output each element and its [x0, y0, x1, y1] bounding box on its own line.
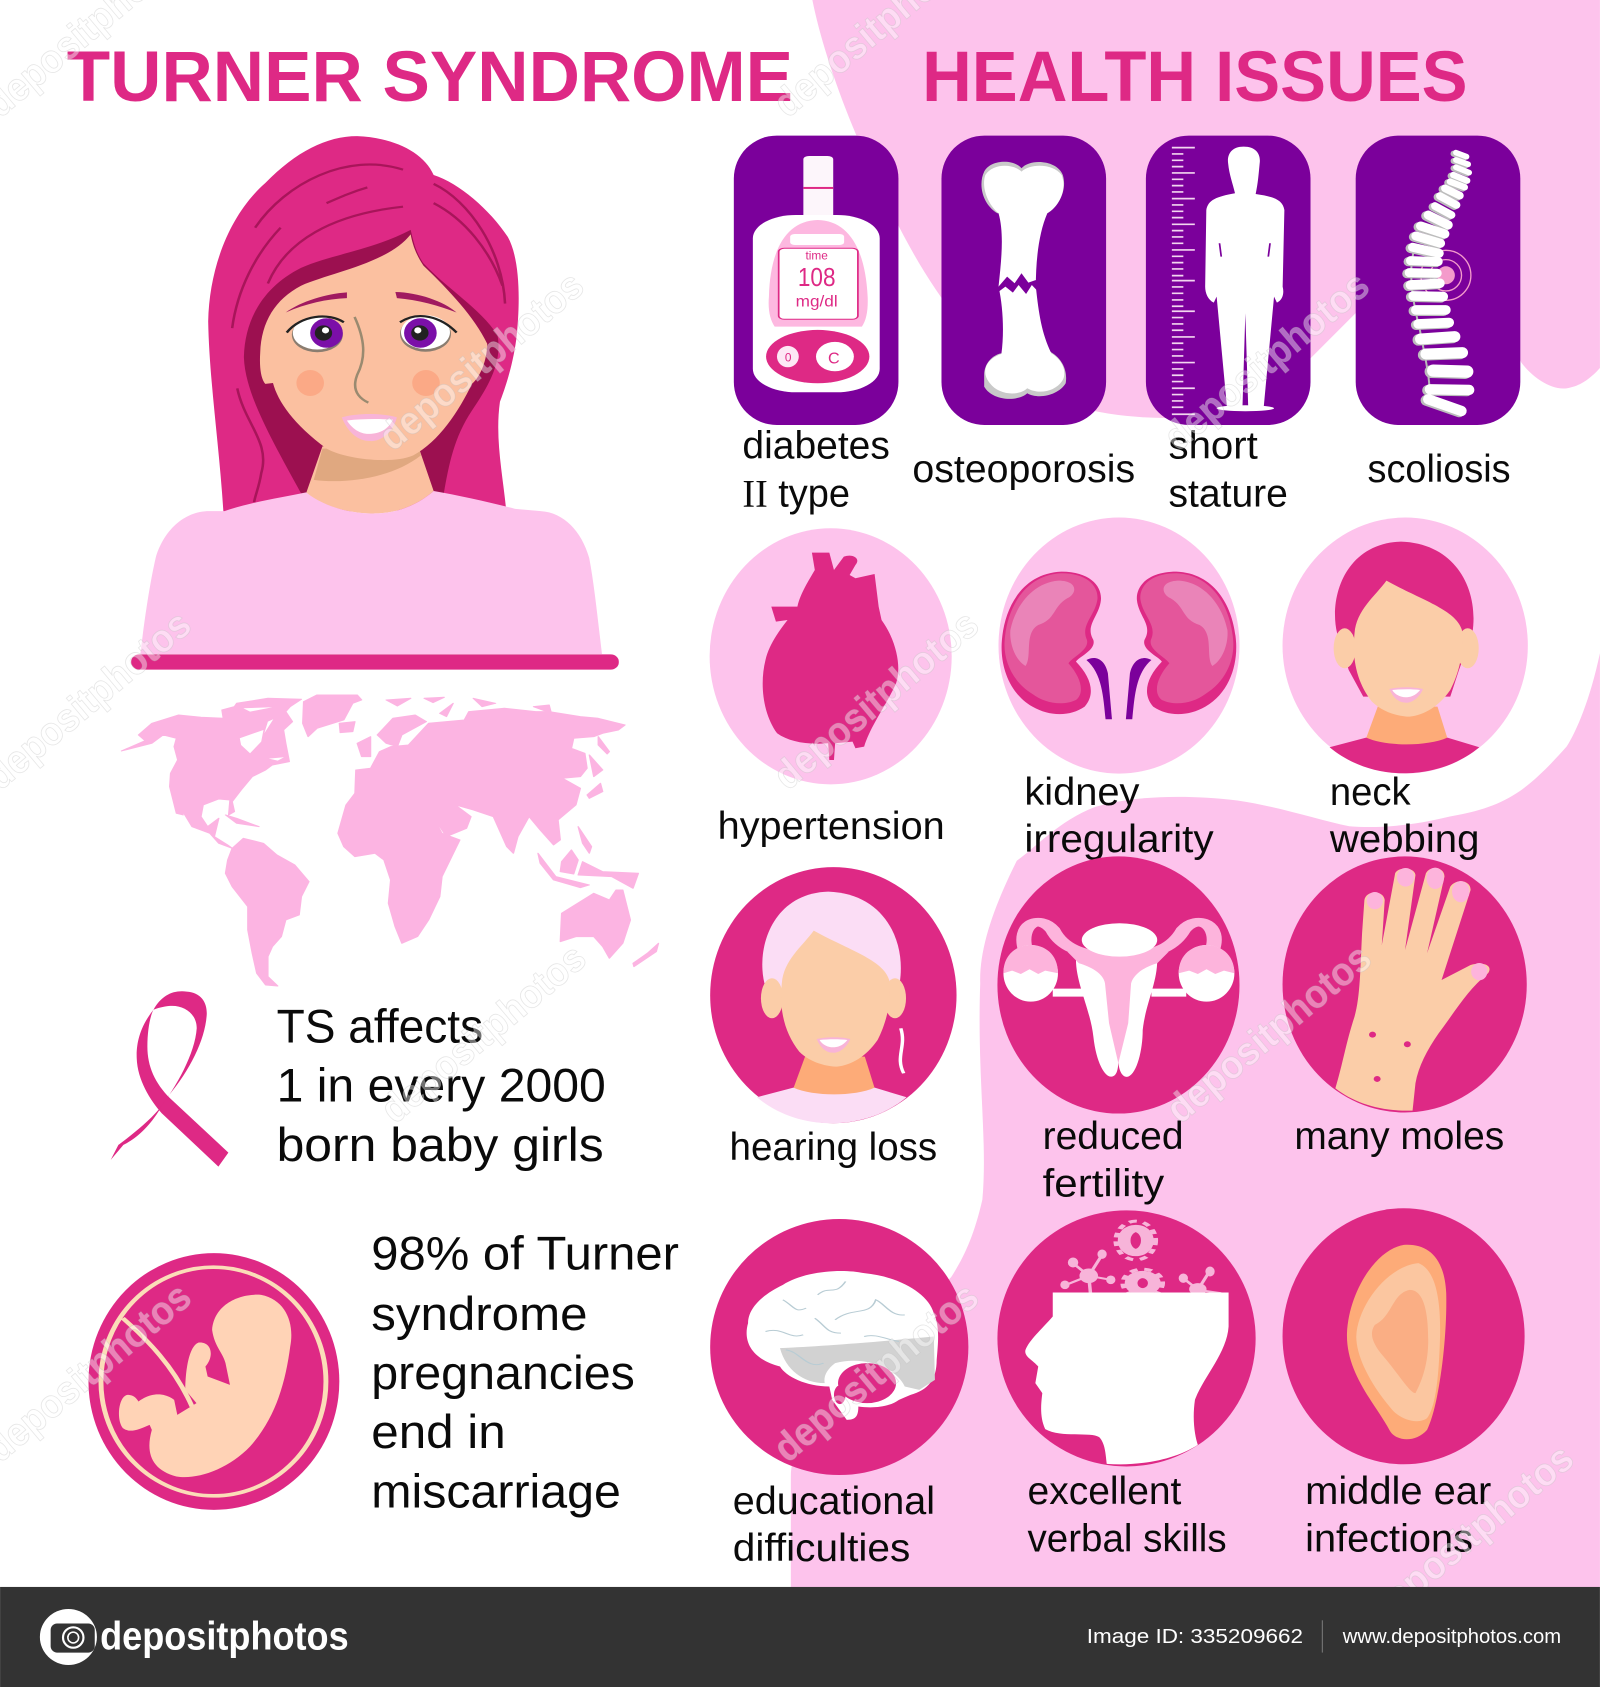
left eye	[287, 316, 344, 352]
spinal cord	[1411, 253, 1430, 397]
label: educational difficulties: educational	[733, 1480, 935, 1523]
text: miscarriage statistic: 98% of Turner	[371, 1228, 679, 1281]
neck	[306, 446, 434, 513]
text: miscarriage statistic: miscarriage	[371, 1465, 621, 1518]
illustration: woman portrait	[131, 136, 619, 670]
icon: embryo	[88, 1253, 339, 1510]
label: excellent verbal skills	[1028, 1470, 1227, 1560]
image id: Image ID: 335209662	[1087, 1625, 1303, 1648]
label: reduced fertility	[1043, 1115, 1184, 1205]
card: short stature	[1146, 136, 1311, 425]
card: diabetes glucose meter: mg/dl	[796, 293, 838, 311]
footer bar	[0, 1587, 1600, 1687]
label: excellent verbal skills: excellent	[1028, 1470, 1182, 1513]
label: diabetes: diabetes	[742, 424, 890, 467]
label: hypertension: hypertension	[718, 805, 945, 848]
label: osteoporosis: osteoporosis	[912, 448, 1135, 491]
label: hearing loss: hearing loss	[730, 1126, 937, 1169]
card: diabetes glucose meter: C	[828, 350, 840, 368]
site url: www.depositphotos.com	[1342, 1625, 1561, 1648]
icon: uterus	[997, 856, 1240, 1114]
icon: ear	[1283, 1208, 1525, 1464]
label: middle ear infections: infections	[1305, 1517, 1473, 1560]
card: diabetes glucose meter: 0	[785, 351, 792, 365]
pain marker	[1421, 250, 1471, 300]
label: educational difficulties: difficulties	[733, 1527, 910, 1570]
watermarks: depositphotos	[765, 602, 987, 798]
spine vertebrae	[1409, 153, 1469, 411]
label: neck webbing: neck	[1330, 771, 1411, 814]
spine shadow	[1407, 154, 1467, 412]
hair	[208, 136, 519, 513]
logo mark	[40, 1609, 97, 1665]
icon: kidneys	[999, 518, 1240, 774]
watermarks: depositphotos	[370, 263, 592, 459]
watermarks: depositphotos	[1158, 936, 1380, 1132]
label: reduced fertility: fertility	[1043, 1162, 1165, 1205]
eyebrows	[286, 292, 457, 312]
hair strands	[232, 165, 505, 502]
label: short stature: short	[1168, 424, 1258, 467]
icon: hypertension heart	[710, 528, 952, 784]
text: TS affects statistic: born baby girls	[277, 1119, 604, 1172]
text: miscarriage statistic: pregnancies	[371, 1347, 635, 1400]
text: TS affects statistic: TS affects	[277, 1001, 483, 1054]
logo wordmark: depositphotos	[100, 1614, 349, 1658]
world map	[121, 695, 658, 986]
neck shadow	[314, 446, 421, 481]
face	[260, 234, 487, 460]
label: neck webbing: webbing	[1329, 818, 1479, 861]
title: Turner Syndrome: TURNER SYNDROME	[67, 38, 793, 117]
card: diabetes glucose meter	[734, 136, 898, 425]
label: scoliosis: scoliosis	[1368, 448, 1511, 491]
card: diabetes glucose meter: time	[805, 248, 828, 262]
card: osteoporosis bone	[941, 136, 1106, 425]
icon: awareness ribbon	[111, 991, 228, 1167]
background blob: bottom right	[791, 653, 1600, 1587]
label: kidney irregularity: irregularity	[1024, 818, 1214, 861]
text: miscarriage statistic	[371, 1228, 679, 1518]
card: diabetes glucose meter: 108	[798, 264, 836, 292]
shirt	[140, 491, 602, 654]
label: short stature	[1168, 424, 1288, 516]
label: kidney irregularity	[1024, 771, 1214, 861]
label: diabetes	[742, 424, 890, 516]
icon: hearing loss face	[710, 867, 957, 1123]
label: neck webbing	[1329, 771, 1479, 861]
mouth	[342, 414, 397, 441]
label: short stature: stature	[1168, 473, 1288, 516]
icon: head with gears	[997, 1210, 1256, 1466]
watermarks: depositphotos	[1360, 1436, 1582, 1632]
card: scoliosis spine	[1356, 136, 1520, 425]
label: diabetes: II type	[742, 473, 850, 516]
icon: brain	[710, 1219, 968, 1475]
label: many moles: many moles	[1294, 1115, 1504, 1158]
nose	[355, 317, 368, 403]
watermarks: depositphotos	[765, 1274, 987, 1471]
watermarks: depositphotos	[1156, 263, 1378, 459]
label: reduced fertility: reduced	[1043, 1115, 1184, 1158]
right eye	[400, 315, 457, 352]
label: middle ear infections: middle ear	[1305, 1470, 1491, 1513]
icon: neck webbing face	[1283, 518, 1528, 774]
label: kidney irregularity: kidney	[1024, 771, 1140, 814]
text: miscarriage statistic: syndrome	[371, 1288, 588, 1341]
text: TS affects statistic	[277, 1001, 606, 1172]
divider	[1322, 1620, 1323, 1653]
base bar	[131, 654, 619, 670]
text: miscarriage statistic: end in	[371, 1406, 506, 1459]
background blob: top right	[812, 0, 1600, 418]
blush	[296, 370, 440, 396]
label: educational difficulties	[733, 1480, 935, 1570]
hair shadow	[244, 230, 499, 493]
icon: hand with moles	[1283, 856, 1527, 1112]
text: TS affects statistic: 1 in every 2000	[277, 1060, 606, 1113]
label: middle ear infections	[1305, 1470, 1491, 1560]
title: Health Issues: HEALTH ISSUES	[922, 38, 1468, 117]
watermarks: depositphotos	[372, 936, 594, 1132]
label: excellent verbal skills: verbal skills	[1028, 1517, 1227, 1560]
